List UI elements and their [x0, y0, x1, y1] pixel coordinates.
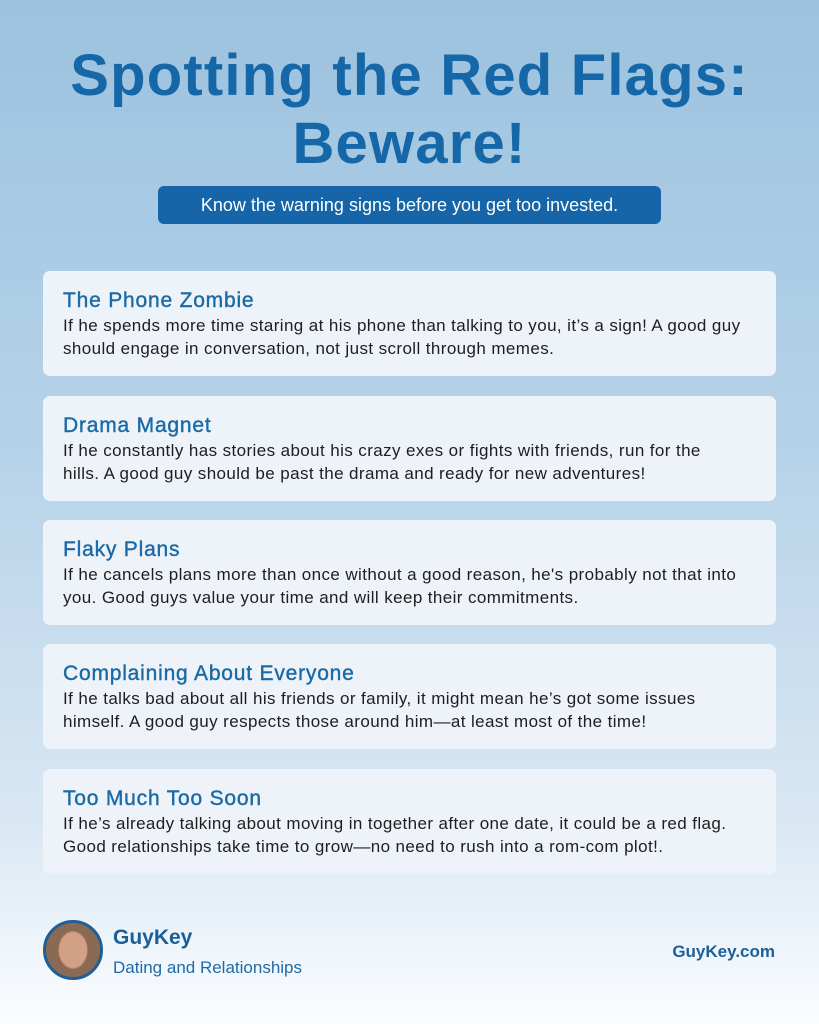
card: phone zombie: The Phone Zombie — [63, 289, 254, 312]
subtitle pill: Know the warning signs before you get too invested. — [201, 195, 618, 215]
card: complaining — [43, 644, 776, 749]
card: too much too soon: If he’s already talking about moving in together after one date, it could be a red flag. Good relationships take time to grow—no need to rush into a rom-com plot!. — [63, 814, 726, 856]
title: Beware! — [292, 111, 527, 176]
card: drama magnet: hills. A good guy should be past the drama and ready for new adventures! — [63, 464, 646, 483]
footer url: GuyKey.com — [672, 942, 775, 961]
card: phone zombie: If he spends more time staring at his phone than talking to you, it’s a sign! A good guy should engage in conversation, not just scroll through memes. — [63, 316, 741, 358]
card: complaining: Complaining About Everyone — [63, 662, 355, 685]
brand tagline: Dating and Relationships — [113, 958, 302, 977]
title: Spotting the Red Flags: — [70, 43, 749, 108]
card: drama magnet: Drama Magnet — [63, 414, 212, 437]
title — [70, 43, 749, 176]
subtitle pill — [158, 186, 661, 224]
card: phone zombie — [43, 271, 776, 376]
footer brand — [43, 920, 302, 980]
card: drama magnet: If he constantly has stories about his crazy exes or fights with friends, run for the — [63, 441, 701, 460]
card: complaining: If he talks bad about all his friends or family, it might mean he’s got some issues himself. A good guy respects those around him—at least most of the time! — [63, 689, 696, 731]
card: flaky plans: Flaky Plans — [63, 538, 180, 561]
card: flaky plans — [43, 520, 776, 625]
card: flaky plans: If he cancels plans more than once without a good reason, he's probably not that into you. Good guys value your time and will keep their commitments. — [63, 565, 736, 607]
card: drama magnet — [43, 396, 776, 501]
brand name: GuyKey — [113, 926, 192, 949]
icon: avatar — [43, 920, 103, 980]
card: too much too soon: Too Much Too Soon — [63, 787, 262, 810]
card: too much too soon — [43, 769, 776, 874]
